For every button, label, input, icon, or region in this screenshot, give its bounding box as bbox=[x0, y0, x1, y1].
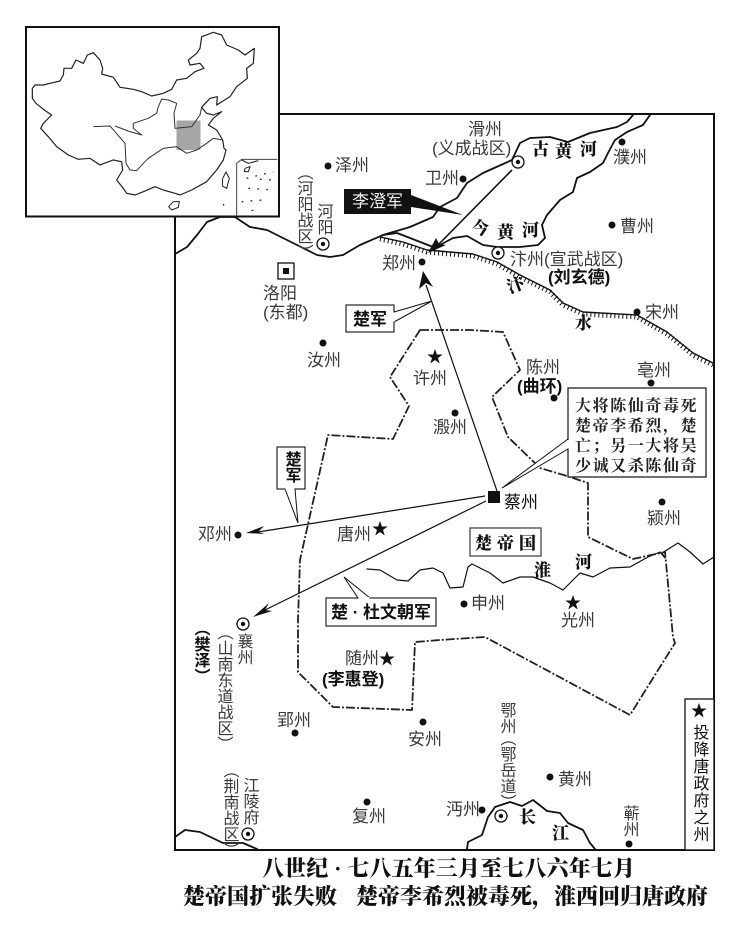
legend: surrendered prefectures: 投降唐政府之州 bbox=[690, 724, 710, 843]
river: Yellow River channels bbox=[175, 115, 650, 257]
callout: Chu Du Wenchao army bbox=[326, 577, 436, 626]
river label: Yangtze: 江 bbox=[552, 824, 569, 843]
place: Caizhou bbox=[488, 491, 538, 512]
callout: Chu army west bbox=[277, 447, 305, 523]
river label: present Yellow River: 黄 bbox=[497, 222, 517, 242]
place: Yinzhou bbox=[433, 410, 467, 437]
place: Luoyang: (东都) bbox=[263, 303, 308, 322]
callout: Chu army north bbox=[346, 301, 432, 332]
place: Jiangling: （荆南战区） bbox=[220, 762, 240, 858]
place: Anzhou: 安州 bbox=[408, 730, 442, 749]
place: Ezhou: （鄂岳道） bbox=[498, 730, 516, 810]
place: Tangzhou: 唐州 bbox=[337, 524, 371, 544]
label box: Chu Empire bbox=[470, 528, 541, 556]
boundary: Chu Empire territory bbox=[298, 330, 675, 715]
river label: Huai River: 河 bbox=[575, 553, 592, 572]
river label: Bian River: 汴 bbox=[504, 272, 529, 297]
place: Puzhou bbox=[613, 138, 647, 167]
place: Zhengzhou: 郑州 bbox=[382, 254, 416, 273]
river label: present Yellow River bbox=[472, 218, 539, 242]
place: Fuzhou: 复州 bbox=[352, 807, 386, 826]
callout: Li Cheng army: 李澄军 bbox=[352, 192, 403, 211]
place: Xiangzhou: （樊泽） bbox=[192, 620, 210, 684]
arrow: Cai to Zhengzhou bbox=[419, 271, 497, 491]
legend: surrendered prefectures bbox=[685, 699, 714, 850]
river label: old Yellow River: 古 bbox=[532, 139, 549, 159]
place: Ezhou: 鄂州 bbox=[498, 702, 516, 734]
place: Ruzhou: 汝州 bbox=[307, 351, 341, 370]
place: Shenzhou: 申州 bbox=[471, 594, 505, 613]
callout: assassination note: 少诚又杀陈仙奇 bbox=[575, 456, 698, 475]
title: 八世纪 · 七八五年三月至七八六年七月 bbox=[262, 856, 635, 881]
place: Anzhou bbox=[408, 718, 442, 749]
place: Heyang bbox=[294, 164, 334, 260]
river label: old Yellow River: 黄 bbox=[555, 141, 575, 161]
title bbox=[183, 856, 708, 911]
callout: Chu army west: 楚军 bbox=[282, 451, 302, 484]
place: Yingzhou: 颍州 bbox=[647, 509, 681, 528]
place: Zezhou: 泽州 bbox=[335, 156, 369, 175]
inset map: China locator bbox=[26, 27, 279, 217]
river label: Bian River bbox=[504, 272, 592, 333]
inset China outline bbox=[32, 32, 277, 217]
place: Weizhou: 卫州 bbox=[425, 169, 459, 188]
inset highlighted region bbox=[176, 120, 200, 150]
place: Heyang: （河阳战区） bbox=[294, 164, 314, 260]
place: Ruzhou bbox=[307, 340, 341, 370]
main map panel bbox=[175, 114, 714, 858]
place: Suizhou: 随州 bbox=[345, 649, 379, 668]
place: Bozhou: 亳州 bbox=[637, 361, 671, 380]
place: Suizhou: (李惠登) bbox=[322, 670, 384, 689]
place: Yingzhou bbox=[647, 498, 681, 528]
callout: assassination note: 楚帝李希烈，楚 bbox=[575, 416, 698, 436]
place: Suizhou bbox=[322, 649, 395, 689]
arrow: Cai to Dengzhou bbox=[246, 496, 485, 534]
place: Chenzhou: (曲环) bbox=[517, 377, 562, 396]
place: Huazhou: (义成战区) bbox=[432, 139, 511, 158]
place: Huazhou: 滑州 bbox=[468, 120, 502, 139]
title: 楚帝国扩张失败 bbox=[183, 884, 337, 909]
place: Xiangzhou: （山南东道战区） bbox=[214, 624, 234, 752]
place: Chenzhou: 陈州 bbox=[526, 358, 560, 377]
place: Tangzhou bbox=[337, 521, 388, 544]
river label: present Yellow River: 今 bbox=[472, 218, 489, 238]
callout: Chu army north: 楚军 bbox=[353, 310, 387, 329]
place: Dengzhou: 邓州 bbox=[198, 525, 232, 544]
place: Xiangzhou bbox=[192, 618, 254, 752]
place: Xuzhou bbox=[413, 349, 447, 388]
place: Luoyang: 洛阳 bbox=[263, 284, 297, 303]
place: Yingzhou (Ying): 郢州 bbox=[277, 711, 311, 730]
place: Caizhou: 蔡州 bbox=[504, 493, 538, 512]
place: Puzhou: 濮州 bbox=[613, 148, 647, 167]
place: Huazhou bbox=[432, 120, 524, 168]
label box: Chu Empire: 楚帝国 bbox=[475, 533, 536, 553]
place: Chenzhou bbox=[517, 358, 562, 402]
place: Bianzhou bbox=[492, 247, 623, 287]
place: Guangzhou bbox=[561, 595, 595, 630]
place: Jiangling bbox=[220, 762, 260, 858]
place: Qizhou: 蕲州 bbox=[620, 805, 640, 837]
arrow: Cai to Xiangzhou bbox=[253, 501, 486, 617]
place: Mianzhou: 沔州 bbox=[446, 800, 480, 819]
river: Bian River with hatched bank bbox=[380, 237, 713, 365]
place: Xiangzhou: 襄州 bbox=[234, 632, 254, 665]
river: Huai River bbox=[367, 543, 714, 590]
river label: present Yellow River: 河 bbox=[522, 221, 539, 240]
callout: assassination note: 亡；另一大将吴 bbox=[575, 436, 698, 455]
place: Bianzhou: 汴州(宣武战区) bbox=[510, 250, 623, 269]
river label: Yangtze bbox=[519, 807, 569, 843]
place: Heyang: 河阳 bbox=[314, 203, 334, 235]
callout: Li Cheng army bbox=[344, 189, 463, 215]
place: Qizhou bbox=[620, 805, 640, 848]
place: Yinzhou: 溵州 bbox=[433, 418, 467, 437]
place: Luoyang bbox=[263, 263, 308, 322]
place: Songzhou: 宋州 bbox=[645, 303, 679, 322]
river label: Huai River bbox=[534, 553, 592, 580]
place: Fuzhou bbox=[352, 798, 386, 826]
place: Guangzhou: 光州 bbox=[561, 611, 595, 630]
callout: Chu Du Wenchao army: 楚 · 杜文朝军 bbox=[331, 602, 431, 622]
place: Caozhou: 曹州 bbox=[620, 217, 654, 236]
place: Jiangling: 江陵府 bbox=[240, 777, 260, 826]
title: 楚帝李希烈被毒死，淮西回归唐政府 bbox=[356, 884, 708, 911]
place: Bianzhou: (刘玄德) bbox=[548, 267, 610, 287]
river label: Huai River: 淮 bbox=[534, 560, 551, 580]
place: Ezhou bbox=[495, 702, 516, 822]
river label: old Yellow River bbox=[532, 139, 597, 161]
river label: old Yellow River: 河 bbox=[580, 140, 597, 159]
river label: Yangtze: 长 bbox=[519, 807, 536, 827]
river label: Bian River: 水 bbox=[575, 313, 592, 333]
place: Xuzhou: 许州 bbox=[413, 369, 447, 388]
arrow: Huazhou to Zhengzhou bbox=[428, 170, 512, 253]
place: Huangzhou: 黄州 bbox=[558, 770, 592, 789]
river: Yangtze River bbox=[175, 800, 595, 849]
callout: assassination note: 大将陈仙奇毒死 bbox=[575, 396, 698, 415]
callout: assassination note bbox=[502, 388, 706, 488]
